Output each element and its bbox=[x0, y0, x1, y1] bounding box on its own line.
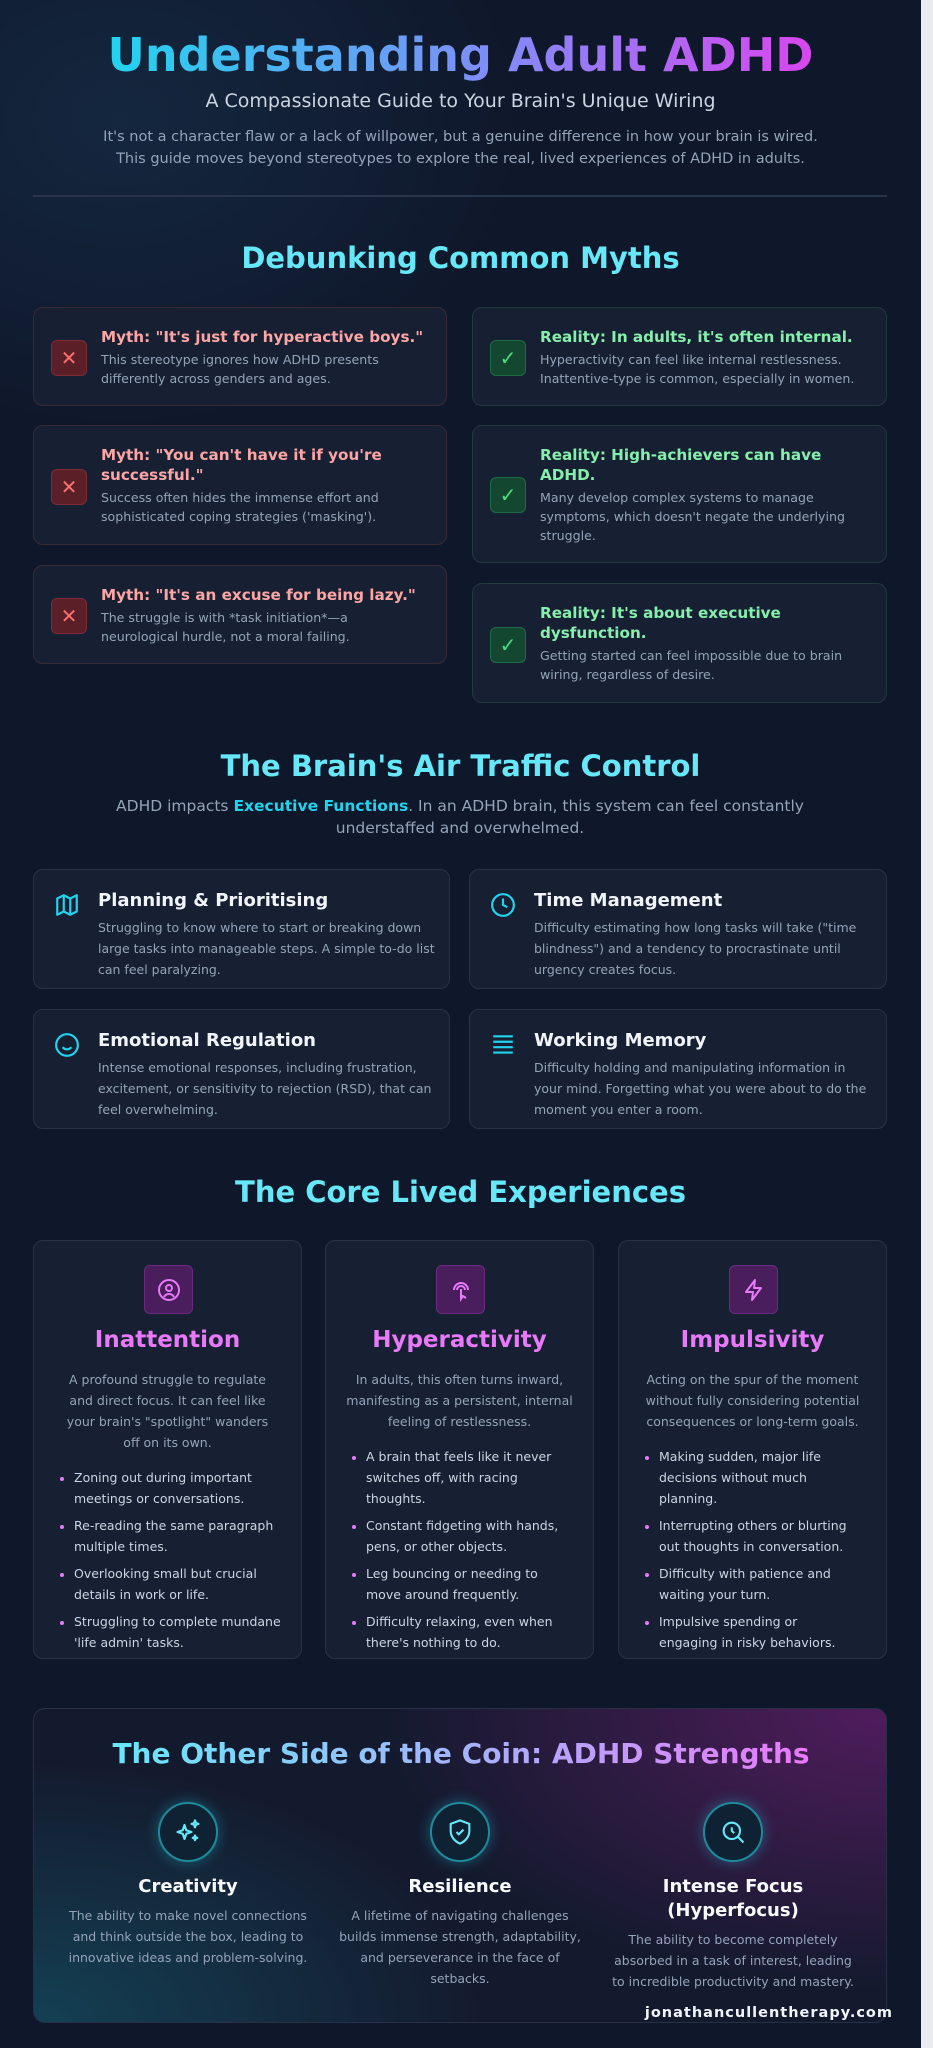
panel: impulsivity: Impulsivity bbox=[681, 1327, 824, 1353]
reality card 3 bbox=[472, 583, 887, 703]
panel: inattention: Struggling to complete mundane 'life admin' tasks. bbox=[74, 1614, 281, 1650]
myth card 3 bbox=[33, 565, 447, 664]
strength: resilience: Resilience bbox=[408, 1876, 512, 1897]
icon: lines bbox=[493, 1035, 513, 1054]
panel: impulsivity: Acting on the spur of the moment without fully considering potential consequences or long-term goals. bbox=[646, 1372, 859, 1429]
icon: clock bbox=[491, 893, 515, 917]
myth card 1: ✕ bbox=[61, 346, 77, 370]
reality card 3: Reality: It's about executive dysfunction. bbox=[540, 604, 781, 642]
myth card 3: Myth: "It's an excuse for being lazy." bbox=[101, 586, 416, 604]
panel: impulsivity: Interrupting others or blurting out thoughts in conversation. bbox=[659, 1518, 847, 1554]
panel: impulsivity: Making sudden, major life decisions without much planning. bbox=[659, 1449, 821, 1506]
myth card 2 bbox=[33, 425, 447, 545]
strength: resilience bbox=[339, 1796, 581, 1986]
strength: creativity: The ability to make novel connections and think outside the box, leading to innovative ideas and problem-solving. bbox=[69, 1908, 307, 1965]
panel: inattention: A profound struggle to regulate and direct focus. It can feel like your brain's "spotlight" wanders off on its own. bbox=[67, 1372, 268, 1450]
heading: strengths: The Other Side of the Coin: ADHD Strengths bbox=[112, 1737, 810, 1770]
card: planning: Planning & Prioritising bbox=[98, 890, 328, 911]
panel: inattention: Re-reading the same paragraph multiple times. bbox=[74, 1518, 273, 1554]
icon: map bbox=[56, 894, 78, 916]
intro text: This guide moves beyond stereotypes to explore the real, lived experiences of ADHD in adults. bbox=[116, 151, 805, 167]
subtitle: A Compassionate Guide to Your Brain's Unique Wiring bbox=[205, 90, 716, 112]
reality card 2 bbox=[472, 425, 887, 563]
reality card 1: Hyperactivity can feel like internal restlessness. Inattentive-type is common, especially in women. bbox=[540, 352, 854, 386]
panel: impulsivity: Impulsive spending or engaging in risky behaviors. bbox=[659, 1614, 835, 1650]
icon: magnifier bbox=[703, 1802, 763, 1862]
reality card 2: ✓ bbox=[500, 483, 516, 507]
panel: inattention: Zoning out during important meetings or conversations. bbox=[74, 1470, 252, 1506]
strength: focus: The ability to become completely absorbed in a task of interest, leading to incredible productivity and mastery. bbox=[612, 1932, 854, 1989]
panel: myths bbox=[33, 307, 887, 703]
heading: executive functions: The Brain's Air Traffic Control bbox=[221, 749, 700, 783]
panel: hyperactivity: Difficulty relaxing, even when there's nothing to do. bbox=[366, 1614, 553, 1650]
intro text bbox=[103, 129, 818, 167]
strength: resilience: A lifetime of navigating challenges builds immense strength, adaptability, and perseverance in the face of setbacks. bbox=[339, 1908, 581, 1986]
footer url: jonathancullentherapy.com bbox=[645, 2005, 893, 2021]
myth card 3: ✕ bbox=[61, 604, 77, 628]
title: Understanding Adult ADHD bbox=[108, 28, 813, 82]
panel: strengths bbox=[33, 1708, 887, 2023]
strength: creativity bbox=[69, 1796, 307, 1965]
heading: myths: Debunking Common Myths bbox=[241, 241, 680, 275]
card: memory: Difficulty holding and manipulating information in your mind. Forgetting what you were about to do the moment you enter a room. bbox=[534, 1060, 866, 1117]
card: planning: Struggling to know where to start or breaking down large tasks into manageable steps. A simple to-do list can feel paralyzing. bbox=[98, 920, 435, 977]
reality card 1: ✓ bbox=[500, 346, 516, 370]
myth card 2: Success often hides the immense effort and sophisticated coping strategies ('masking'). bbox=[101, 490, 379, 524]
card: time: Time Management bbox=[534, 890, 722, 911]
panel: inattention: Inattention bbox=[95, 1327, 240, 1353]
reality card 1 bbox=[472, 307, 887, 406]
card: time: Difficulty estimating how long tasks will take ("time blindness") and a tendency to procrastinate until urgency creates focus. bbox=[534, 920, 856, 977]
card: emotional: Emotional Regulation bbox=[98, 1030, 316, 1051]
panel: inattention: Overlooking small but crucial details in work or life. bbox=[74, 1566, 257, 1602]
panel: hyperactivity: A brain that feels like it never switches off, with racing thoughts. bbox=[366, 1449, 551, 1506]
icon: sparkles bbox=[158, 1802, 218, 1862]
myth card 1: Myth: "It's just for hyperactive boys." bbox=[101, 328, 423, 346]
panel: hyperactivity: Hyperactivity bbox=[372, 1327, 547, 1353]
card: emotional bbox=[33, 1009, 450, 1129]
icon: person circle bbox=[144, 1265, 193, 1314]
card: emotional: Intense emotional responses, including frustration, excitement, or sensitivity to rejection (RSD), that can feel overwhelming. bbox=[98, 1060, 431, 1117]
reality card 2: Many develop complex systems to manage symptoms, which doesn't negate the underlying struggle. bbox=[540, 490, 845, 543]
myth card 1 bbox=[33, 307, 447, 406]
heading: core experiences: The Core Lived Experiences bbox=[235, 1175, 686, 1209]
reality card 3: Getting started can feel impossible due to brain wiring, regardless of desire. bbox=[540, 648, 842, 682]
panel: impulsivity bbox=[618, 1240, 887, 1659]
panel: hyperactivity: Leg bouncing or needing to move around frequently. bbox=[366, 1566, 538, 1602]
intro: executive functions: ADHD impacts Executive Functions. In an ADHD brain, this system can feel constantly bbox=[116, 797, 804, 815]
reality card 2: Reality: High-achievers can have ADHD. bbox=[540, 446, 821, 484]
myth card 3: The struggle is with *task initiation*—a neurological hurdle, not a moral failing. bbox=[101, 610, 350, 644]
myth card 2: Myth: "You can't have it if you're successful." bbox=[101, 446, 382, 484]
panel: hyperactivity: In adults, this often turns inward, manifesting as a persistent, internal feeling of restlessness. bbox=[346, 1372, 573, 1429]
strength: creativity: Creativity bbox=[138, 1876, 238, 1897]
intro: executive functions: understaffed and overwhelmed. bbox=[336, 819, 584, 837]
icon: smile bbox=[55, 1033, 79, 1057]
panel: executive function cards bbox=[33, 869, 887, 1129]
icon: pointer bbox=[436, 1265, 485, 1314]
myth card 2: ✕ bbox=[61, 475, 77, 499]
card: memory bbox=[469, 1009, 887, 1129]
strength: focus bbox=[612, 1796, 854, 1989]
panel: hyperactivity: Constant fidgeting with hands, pens, or other objects. bbox=[366, 1518, 558, 1554]
card: time bbox=[469, 869, 887, 989]
panel: hyperactivity bbox=[325, 1240, 594, 1659]
panel: impulsivity: Difficulty with patience and waiting your turn. bbox=[659, 1566, 831, 1602]
myth card 1: This stereotype ignores how ADHD presents differently across genders and ages. bbox=[101, 352, 379, 386]
intro text: It's not a character flaw or a lack of willpower, but a genuine difference in how your brain is wired. bbox=[103, 129, 818, 145]
intro: executive functions bbox=[116, 797, 804, 837]
strength: focus: Intense Focus bbox=[663, 1876, 803, 1897]
reality card 3: ✓ bbox=[500, 633, 516, 657]
icon: shield bbox=[430, 1802, 490, 1862]
card: memory: Working Memory bbox=[534, 1030, 706, 1051]
strength: focus: (Hyperfocus) bbox=[667, 1900, 799, 1921]
icon: lightning bbox=[729, 1265, 778, 1314]
panel: inattention bbox=[33, 1240, 302, 1659]
reality card 1: Reality: In adults, it's often internal. bbox=[540, 328, 853, 346]
card: planning bbox=[33, 869, 450, 989]
